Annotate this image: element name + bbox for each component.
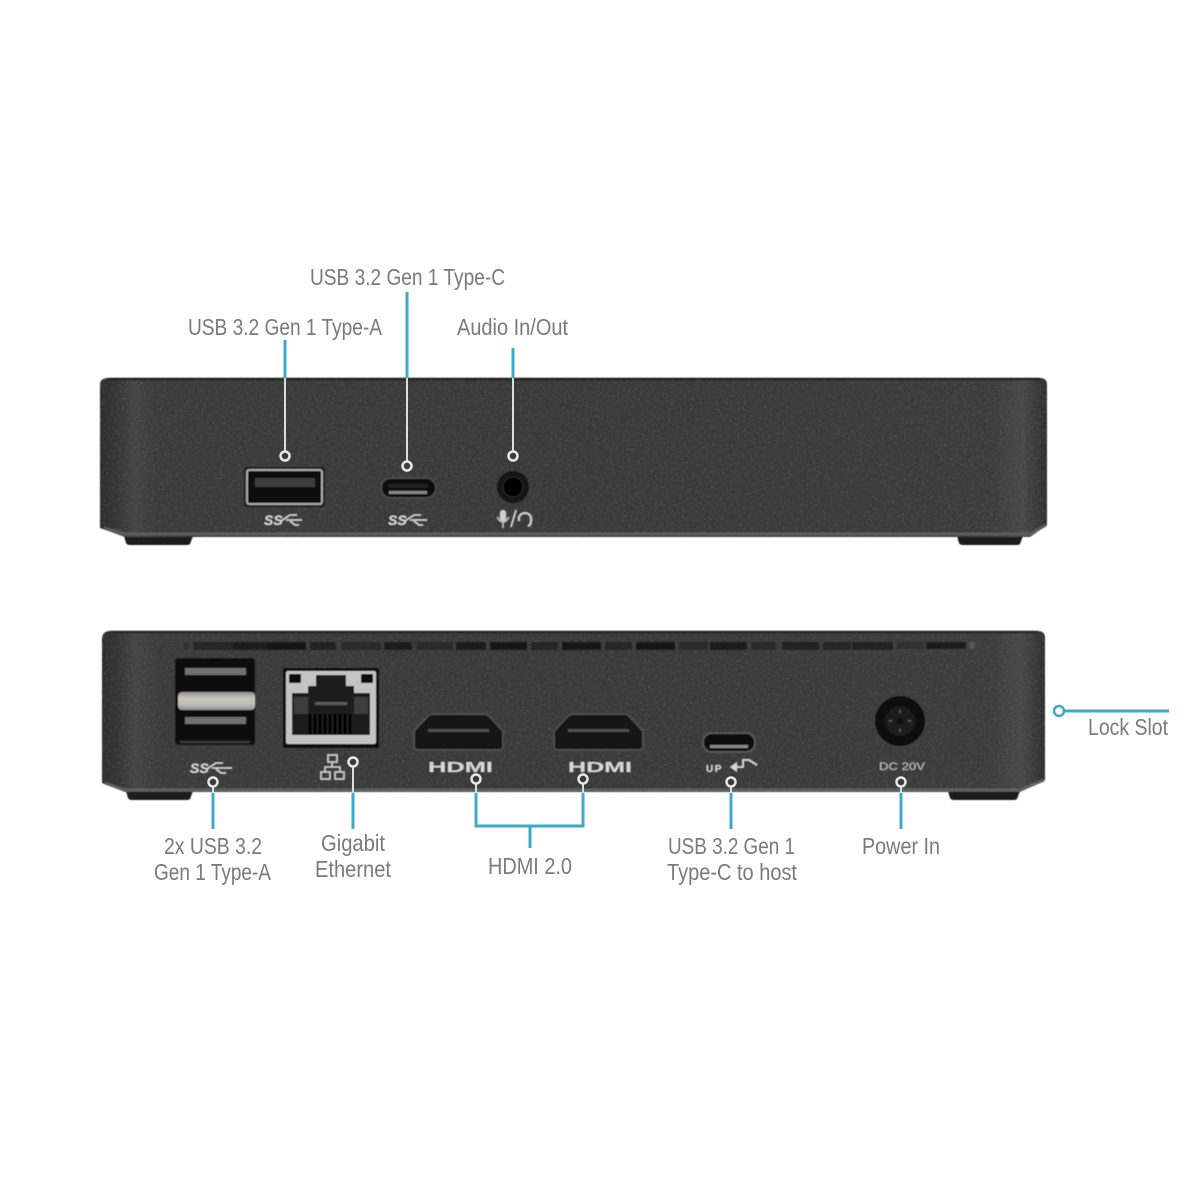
device: front view (100, 378, 1047, 545)
port: HDMI 1 (414, 714, 503, 750)
icon: upstream power: UP (706, 764, 723, 775)
port: power jack (875, 696, 925, 746)
icon: HDMI mark 2: HDMI (568, 759, 632, 776)
icon: SuperSpeed USB-C: SS (388, 512, 407, 528)
label: USB 3.2 Gen 1 Type-A: USB 3.2 Gen 1 Type-A (188, 314, 383, 340)
label: HDMI 2.0: HDMI 2.0 (488, 853, 572, 879)
callout: USB-A front (188, 314, 383, 460)
callout: USB-C front (310, 264, 505, 470)
callout: audio (457, 314, 569, 460)
port: USB-C front (381, 478, 436, 498)
device: rear view (102, 631, 1045, 800)
icon: SuperSpeed USB-C (388, 512, 427, 528)
icon: SuperSpeed rear USB-A: SS (190, 760, 209, 776)
icon: SuperSpeed USB-A: SS (264, 512, 283, 528)
callout: dual USB-A (154, 778, 272, 885)
label: Gigabit Ethernet: Gigabit (321, 830, 386, 856)
rear feet (126, 791, 1020, 800)
callout: power (862, 778, 940, 859)
label: Lock Slot: Lock Slot (1088, 714, 1169, 740)
icon: DC 20V: DC 20V (879, 761, 926, 773)
front body (100, 378, 1047, 537)
icon: HDMI mark 1: HDMI (428, 759, 493, 776)
label: Audio In/Out: Audio In/Out (457, 314, 569, 340)
callout: lock slot (1054, 706, 1169, 740)
icon: mic and headset (497, 510, 531, 528)
icon: SuperSpeed USB-A (264, 512, 302, 528)
label: USB 3.2 Gen 1 Type-C: USB 3.2 Gen 1 Type-C (310, 264, 505, 290)
label: Power In: Power In (862, 833, 940, 859)
label: 2x USB 3.2 Gen 1 Type-A: 2x USB 3.2 (164, 833, 262, 859)
icon: upstream power (706, 760, 757, 775)
port: USB-C host (703, 733, 755, 752)
label: Gigabit Ethernet: Ethernet (315, 856, 392, 882)
port: HDMI 2 (554, 714, 643, 750)
rear body (102, 631, 1045, 792)
port: audio jack (497, 471, 529, 503)
callout: USB-C host (667, 778, 798, 885)
callout: HDMI bracket (472, 774, 588, 879)
label: USB 3.2 Gen 1 Type-C to host: Type-C to host (667, 859, 798, 885)
callout: Ethernet (315, 758, 392, 882)
port: Ethernet (283, 668, 379, 748)
port: USB-A front (244, 467, 325, 507)
icon: network (321, 755, 344, 779)
front feet (124, 536, 1023, 545)
label: USB 3.2 Gen 1 Type-C to host: USB 3.2 Gen 1 (668, 833, 795, 859)
vent slots (183, 641, 975, 650)
port: dual USB-A (175, 658, 255, 745)
icon: SuperSpeed rear USB-A (190, 760, 232, 776)
label: 2x USB 3.2 Gen 1 Type-A: Gen 1 Type-A (154, 859, 272, 885)
